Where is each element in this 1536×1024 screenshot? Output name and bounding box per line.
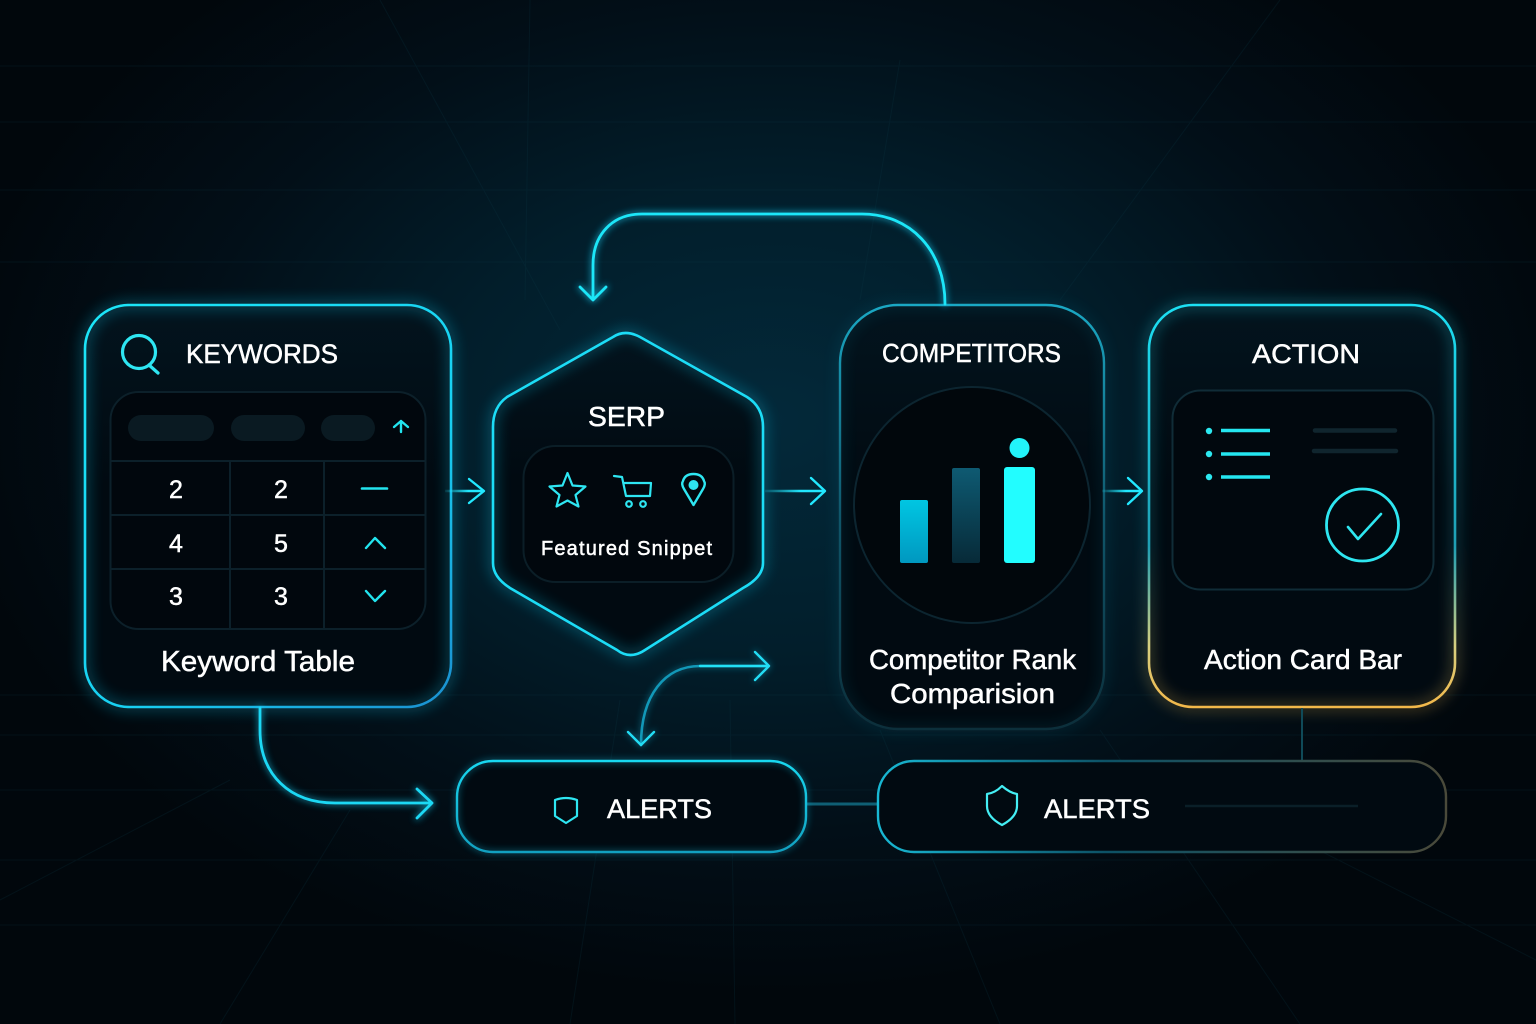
icon: shield <box>987 786 1017 825</box>
caption: action card bar: Action Card Bar <box>1204 644 1402 675</box>
panel: keywords <box>85 305 451 707</box>
keyword table <box>110 392 426 629</box>
caption: competitor rank comparison: Competitor Rank <box>869 644 1077 675</box>
panel: competitors: Comparision <box>890 678 1055 709</box>
keyword table: 2 <box>169 476 183 504</box>
arrow: competitors feedback to serp <box>580 214 945 304</box>
label: alerts: ALERTS <box>1044 794 1150 824</box>
keyword table: 4 <box>169 530 183 558</box>
heading: competitors: COMPETITORS <box>882 338 1061 368</box>
icon: magnifier <box>122 336 158 373</box>
icon: cart <box>614 476 651 507</box>
caption: keyword table: Keyword Table <box>161 646 355 678</box>
arrow: keywords to serp <box>445 479 484 503</box>
action card <box>1172 390 1434 590</box>
connector: alerts to alerts bar <box>806 802 878 806</box>
arrow: competitors to action <box>1102 478 1142 504</box>
panel: action <box>1149 305 1455 707</box>
heading: keywords: KEYWORDS <box>186 339 338 369</box>
keyword table: 3 <box>274 583 288 611</box>
panel: alerts right <box>878 761 1446 852</box>
bar chart: rank comparison <box>854 387 1090 623</box>
icon: location pin <box>682 474 705 505</box>
keyword table: 5 <box>274 530 288 558</box>
arrow: keywords to alerts <box>260 708 432 818</box>
caption: featured snippet: Featured Snippet <box>541 538 712 560</box>
icon: small shield <box>555 798 577 823</box>
icon: check circle <box>1326 489 1398 561</box>
placeholder line <box>1185 805 1358 807</box>
panel: competitors <box>840 305 1104 729</box>
label: alerts: ALERTS <box>607 794 712 824</box>
serp features box <box>524 446 734 582</box>
keyword table: 2 <box>274 476 288 504</box>
heading: action: ACTION <box>1252 339 1360 369</box>
arrow: alerts bidirectional to competitors <box>628 652 769 745</box>
connector: action to alerts bar <box>1301 708 1303 761</box>
panel: alerts left <box>457 761 806 852</box>
panel: serp <box>493 333 763 655</box>
icon: star <box>550 473 586 506</box>
heading: serp: SERP <box>588 401 665 432</box>
keyword table: 3 <box>169 583 183 611</box>
arrow: serp to competitors <box>765 478 825 504</box>
